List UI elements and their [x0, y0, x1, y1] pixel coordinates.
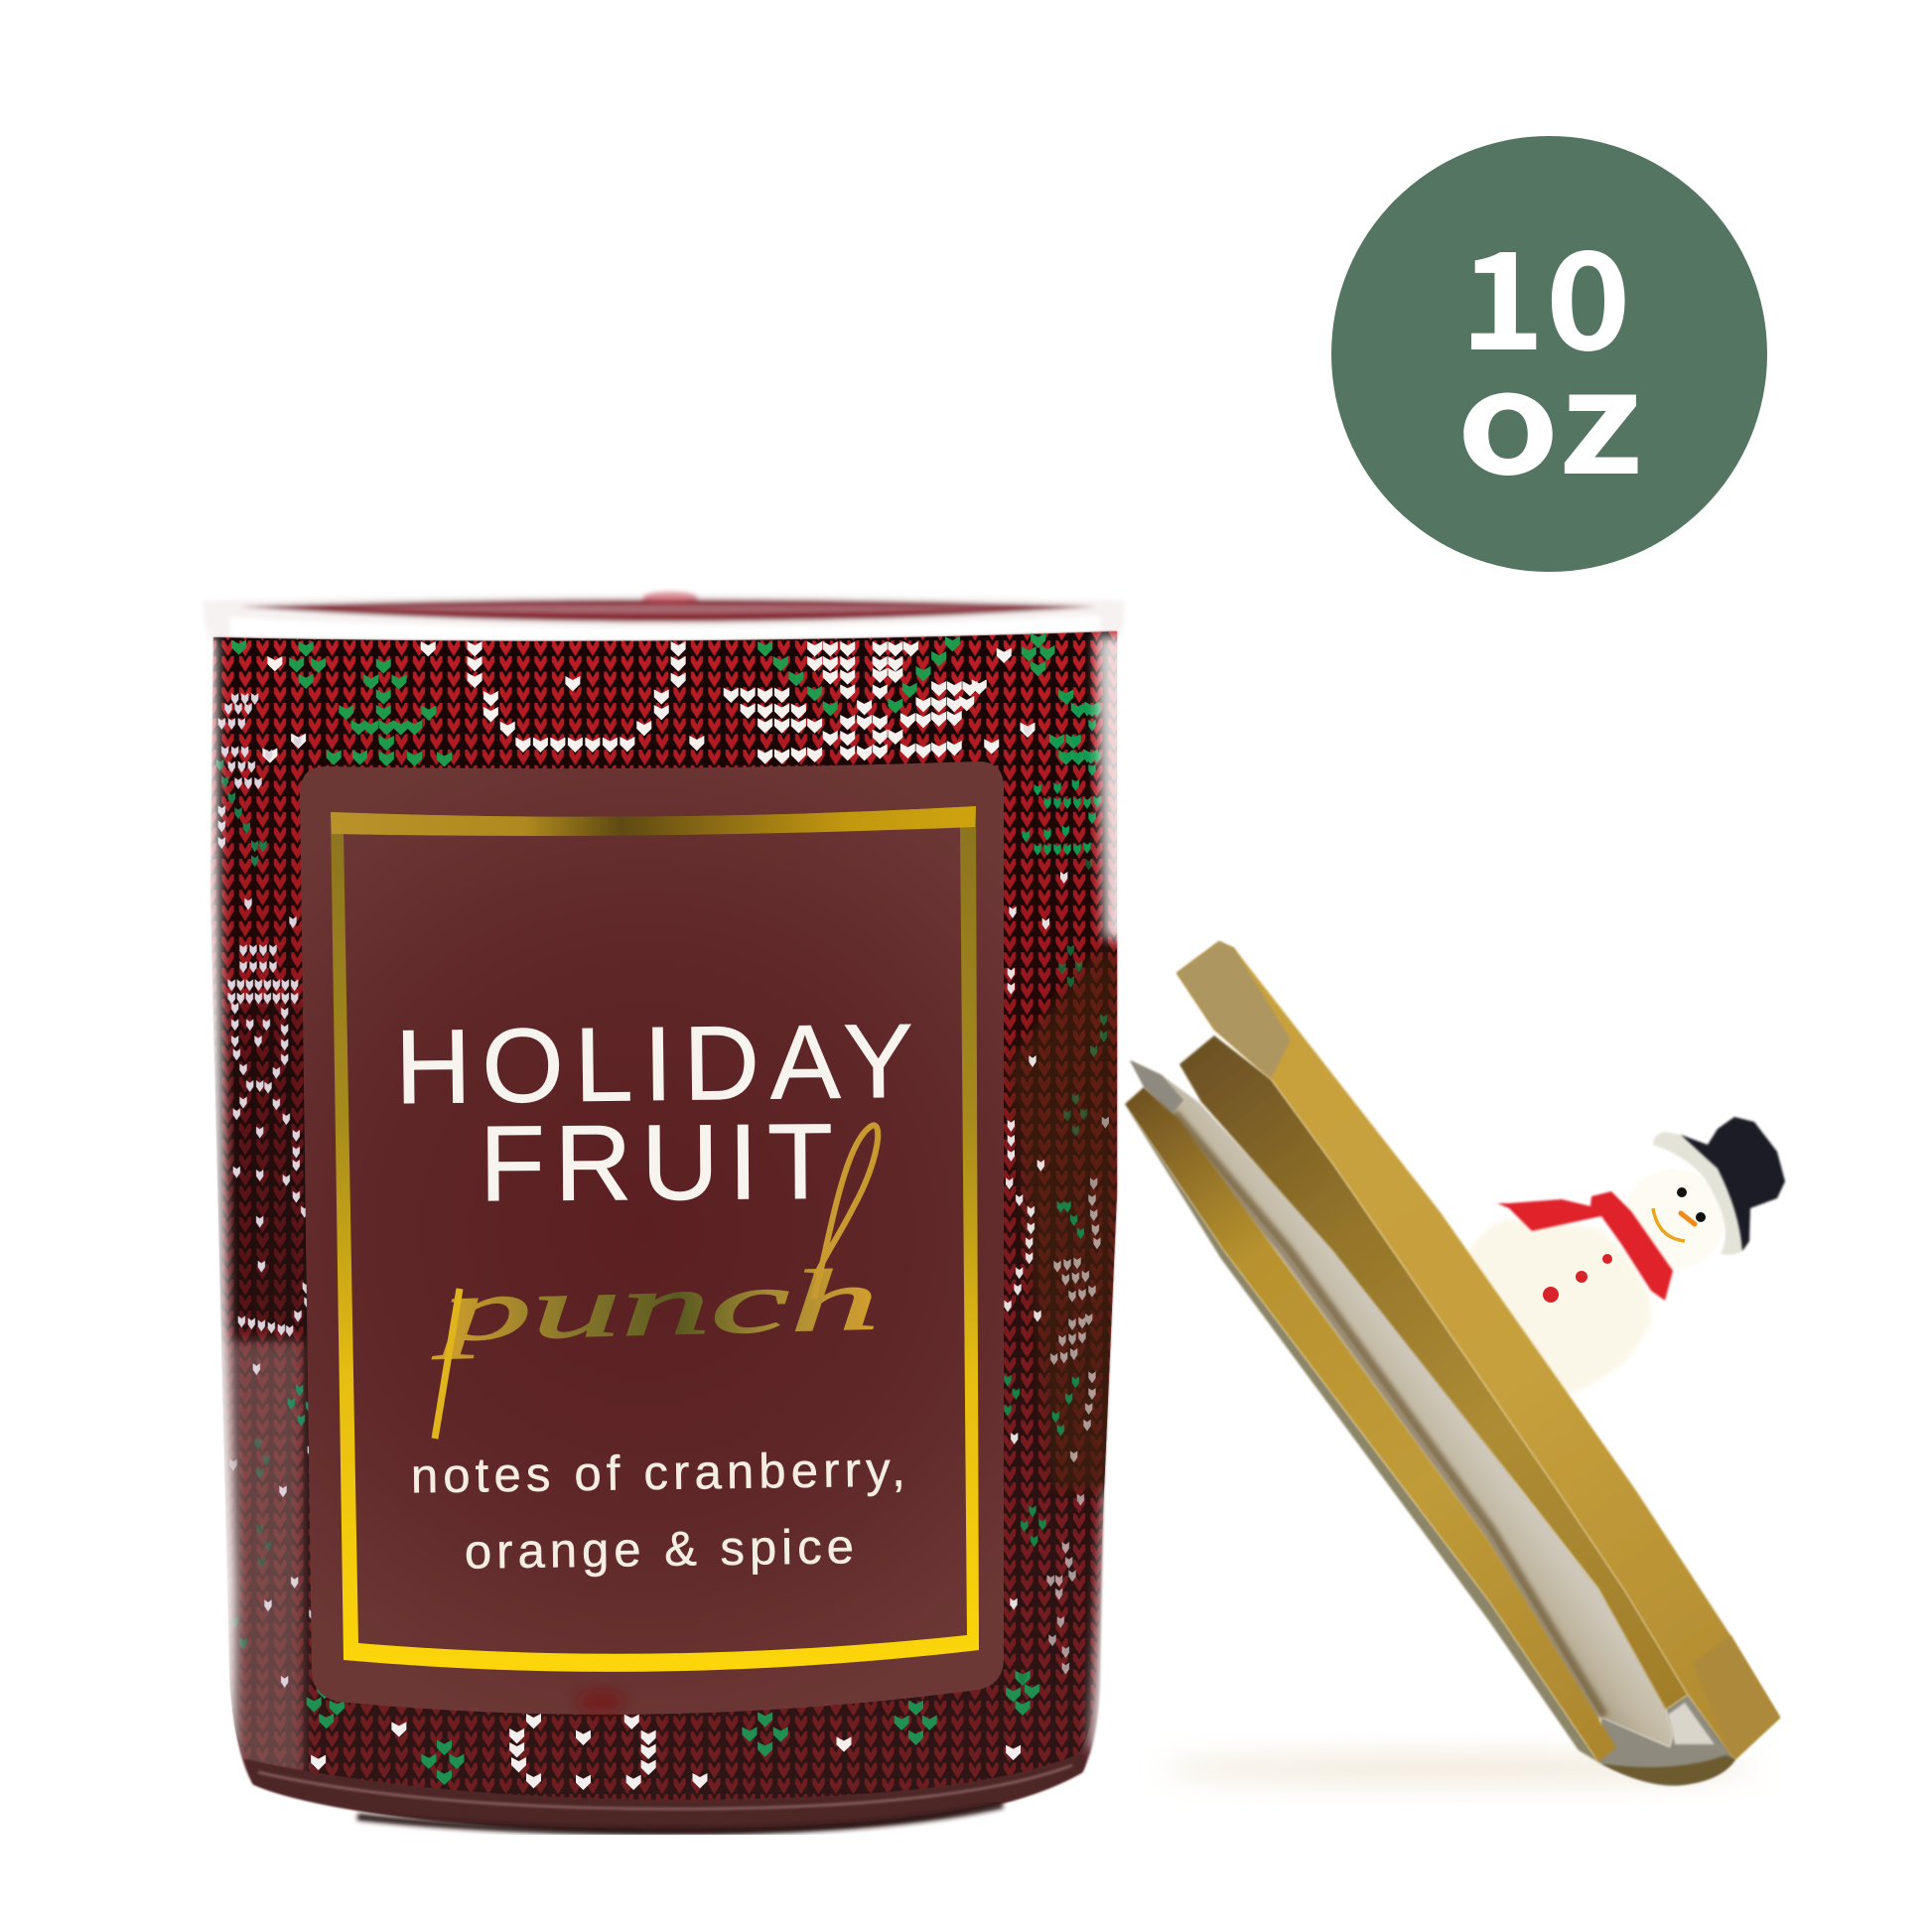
jar base	[244, 1754, 1085, 1832]
buttons	[1543, 1254, 1612, 1303]
jar edge fades	[179, 616, 1142, 1787]
paper tip	[1130, 1060, 1183, 1115]
title: Holiday Fruit: HOLIDAY	[394, 1003, 914, 1126]
top plate	[1176, 941, 1780, 1759]
jar body	[210, 631, 1117, 1832]
knit pattern	[199, 625, 1132, 1857]
muted left lower panel	[213, 1340, 303, 1777]
paper liner	[1130, 1060, 1673, 1747]
script word: punch	[429, 1125, 881, 1439]
green stitches bottom	[307, 1671, 1039, 1785]
left side stitches upper	[218, 693, 302, 1186]
head	[1623, 1170, 1725, 1269]
bamboo lid	[1125, 941, 1780, 1786]
glass rim	[203, 592, 1125, 640]
inner gap	[1668, 1703, 1715, 1744]
hat brim	[1653, 1132, 1749, 1255]
white stitches top	[262, 641, 1035, 764]
snowman topper	[1459, 1117, 1785, 1395]
right side stitches upper	[1006, 725, 1109, 1189]
plate lower end	[1693, 1635, 1780, 1759]
title: Holiday Fruit: FRUIT	[480, 1101, 833, 1223]
right side green lower	[1004, 1201, 1084, 1685]
left side stitches lower	[229, 1191, 317, 1688]
lid underside shadow	[1598, 1695, 1735, 1786]
brown reflection	[1008, 950, 1120, 1489]
middle disc	[1179, 1035, 1688, 1710]
candle jar	[179, 592, 1142, 1857]
size badge: 10 oz: oz	[1456, 310, 1642, 514]
scarf	[1497, 1191, 1673, 1301]
dark left panel	[223, 1003, 308, 1330]
scent notes	[410, 1443, 905, 1580]
body	[1459, 1219, 1651, 1395]
face	[1653, 1187, 1706, 1241]
title: Holiday Fruit	[394, 1003, 914, 1223]
gold frame	[331, 806, 979, 1672]
left side green upper	[216, 759, 267, 867]
size badge: 10 oz	[1331, 136, 1767, 572]
white stitches bottom	[311, 1714, 1021, 1790]
script word: punch: punch	[429, 1252, 881, 1360]
right side green upper	[1023, 693, 1107, 1137]
lower disc underside	[1125, 1104, 1598, 1762]
right side stitches lower	[1004, 1194, 1101, 1675]
left side green lower	[231, 1385, 313, 1650]
green stitches top	[231, 633, 1100, 767]
floor shadow	[1162, 1753, 1757, 1785]
scent notes: notes of cranberry,	[410, 1443, 905, 1503]
gold frame top band	[331, 806, 976, 836]
scent notes: orange & spice	[465, 1520, 854, 1580]
liner shaded edge	[1172, 1115, 1601, 1718]
size badge: 10 oz: 10	[1459, 194, 1631, 389]
plate weathered end	[1176, 941, 1291, 1079]
product label	[300, 761, 1004, 1715]
hat	[1681, 1117, 1785, 1251]
lower disc	[1125, 1087, 1616, 1762]
